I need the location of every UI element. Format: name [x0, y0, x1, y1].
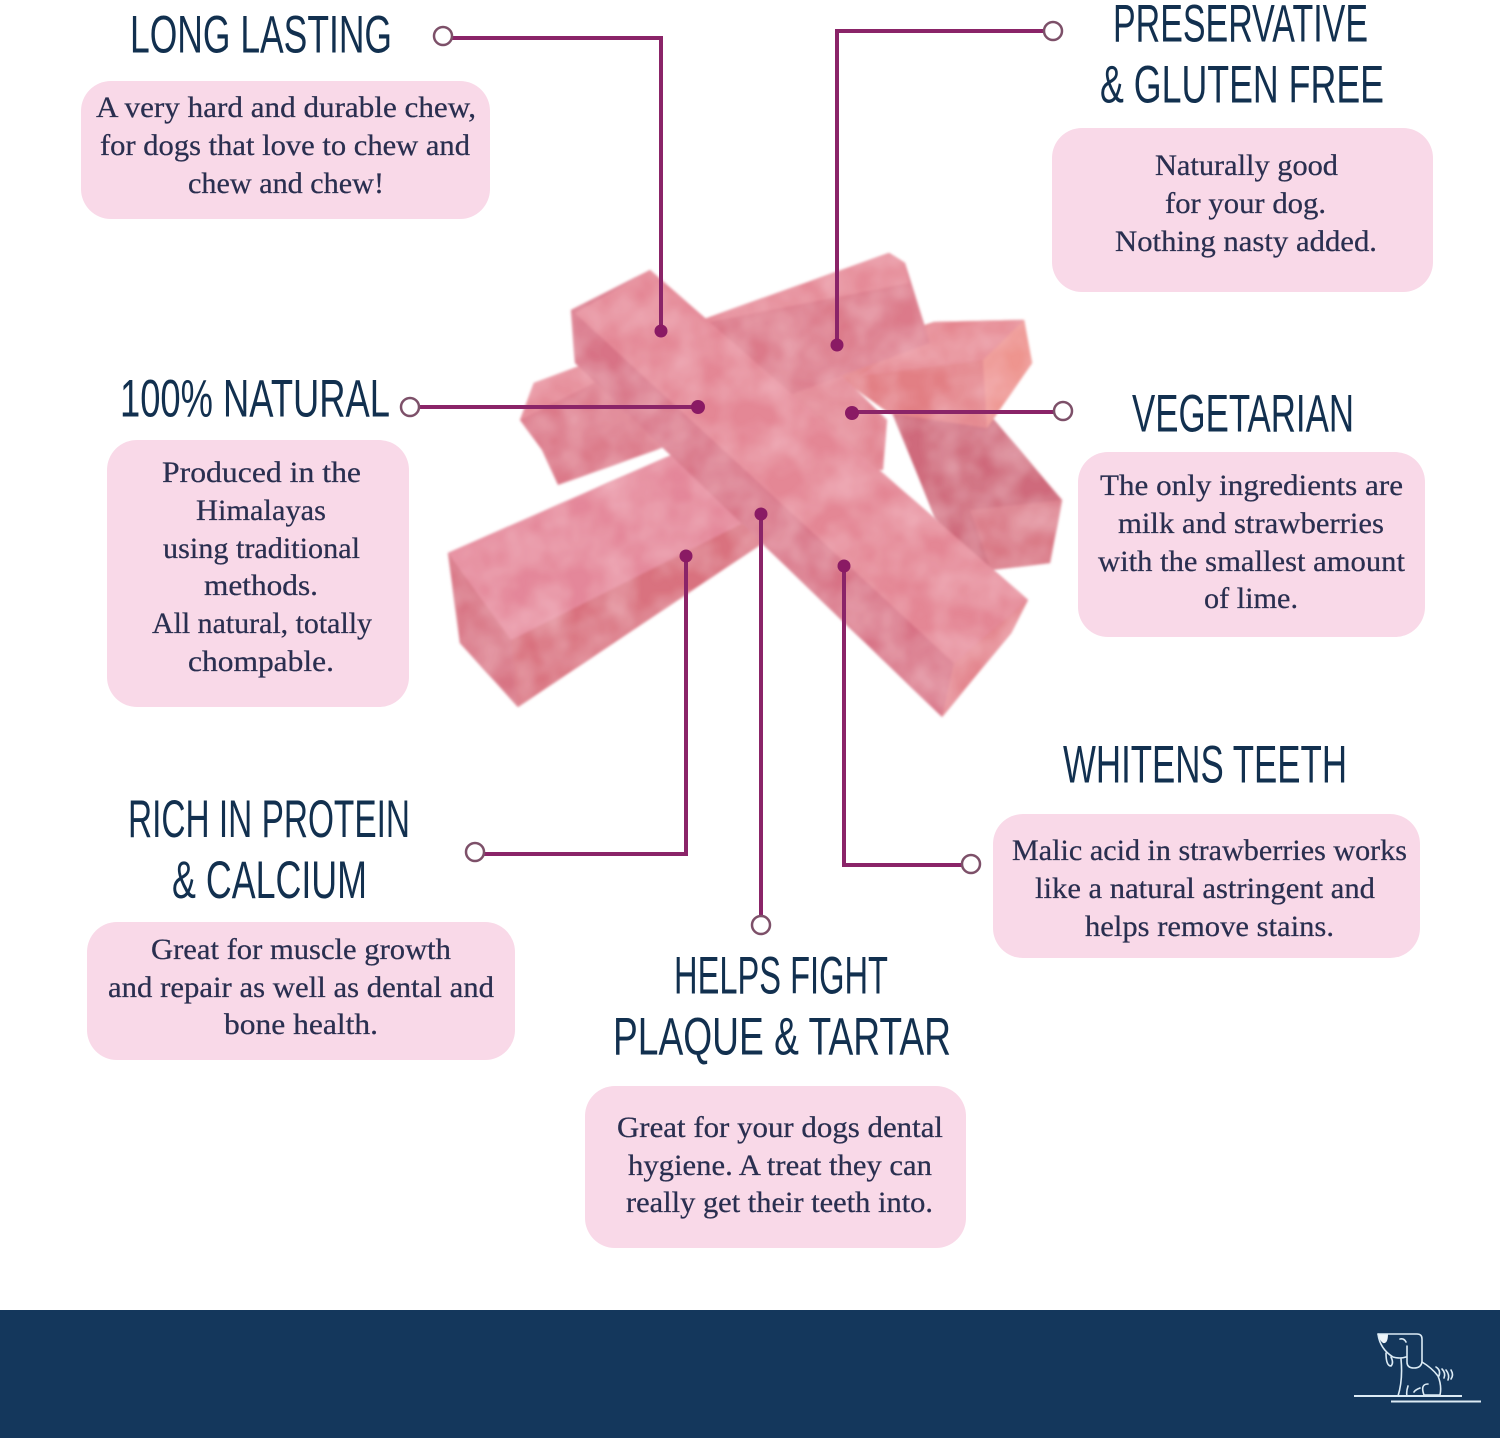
heading: rich in protein and calcium [128, 790, 410, 910]
panel: preservative and gluten free [1052, 0, 1433, 292]
text box: 100% natural: All natural, totally [152, 607, 372, 640]
heading: helps fight plaque and tartar: HELPS FIGHT [674, 946, 888, 1006]
heading: vegetarian: VEGETARIAN [1132, 384, 1354, 444]
panel: vegetarian [1078, 384, 1425, 637]
text box: whitens teeth: helps remove stains. [1085, 910, 1334, 943]
heading: helps fight plaque and tartar [613, 946, 951, 1066]
panel: whitens teeth [993, 736, 1420, 958]
panel: long lasting [81, 6, 490, 219]
text box: vegetarian: milk and strawberries [1118, 507, 1384, 540]
chew stick: lower right [889, 405, 1062, 570]
heading: rich in protein and calcium: & CALCIUM [172, 851, 367, 910]
panel: 100% natural [107, 370, 409, 707]
connector: rich in protein [466, 550, 692, 861]
text box: vegetarian: with the smallest amount [1098, 545, 1406, 578]
heading: 100% natural: 100% NATURAL [120, 370, 390, 428]
chew stick: right end behind centre stick [780, 372, 887, 470]
text box: 100% natural [107, 440, 409, 707]
chew stick: front centre [571, 270, 1028, 717]
text box: rich in protein and calcium: bone health. [224, 1008, 378, 1041]
text box: rich in protein and calcium: Great for muscle growth [151, 933, 451, 966]
text box: long lasting: for dogs that love to chew and [100, 129, 470, 162]
icon: sitting dog logo [1354, 1334, 1481, 1402]
text box: preservative and gluten free: for your dog. [1165, 187, 1326, 220]
text box: long lasting [81, 81, 490, 219]
text box: rich in protein and calcium [87, 922, 515, 1060]
panel: helps fight plaque and tartar [585, 946, 966, 1248]
text box: 100% natural: using traditional [163, 532, 360, 565]
text box: vegetarian: The only ingredients are [1100, 469, 1403, 502]
text box: helps fight plaque and tartar: Great for your dogs dental [617, 1111, 943, 1144]
heading: preservative and gluten free [1100, 0, 1384, 114]
connector: helps fight plaque [752, 508, 770, 934]
heading: long lasting: LONG LASTING [130, 6, 392, 64]
chew stick: back [520, 253, 930, 485]
text box: 100% natural: Himalayas [196, 494, 326, 527]
heading: whitens teeth: WHITENS TEETH [1063, 736, 1347, 794]
connector: vegetarian [845, 402, 1072, 420]
heading: rich in protein and calcium: RICH IN PROTEIN [128, 790, 410, 849]
chew stick: upper right [820, 320, 1032, 428]
text box: preservative and gluten free: Naturally good [1155, 149, 1338, 182]
text box: whitens teeth: Malic acid in strawberries works [1012, 834, 1407, 867]
text box: whitens teeth: like a natural astringent and [1035, 872, 1375, 905]
connector: preservative and gluten free [830, 22, 1062, 352]
connector: 100% natural [401, 398, 705, 416]
text box: helps fight plaque and tartar: hygiene. A treat they can [628, 1149, 932, 1182]
text box: preservative and gluten free [1052, 128, 1433, 292]
text box: helps fight plaque and tartar [585, 1086, 966, 1248]
footer band [0, 1310, 1500, 1438]
text box: 100% natural: methods. [204, 569, 318, 602]
text box: long lasting: chew and chew! [188, 167, 384, 200]
text box: whitens teeth [993, 814, 1420, 958]
product photo: pink chew sticks [448, 253, 1062, 717]
connector: long lasting [434, 27, 668, 338]
panel: rich in protein and calcium [87, 790, 515, 1060]
text box: 100% natural: Produced in the [162, 456, 361, 489]
chew stick: lower left [448, 447, 790, 707]
text box: rich in protein and calcium: and repair as well as dental and [108, 971, 494, 1004]
connector: whitens teeth [838, 560, 980, 873]
text box: helps fight plaque and tartar: really get their teeth into. [626, 1186, 933, 1219]
text box: vegetarian [1078, 452, 1425, 637]
text box: 100% natural: chompable. [188, 645, 334, 678]
text box: vegetarian: of lime. [1204, 582, 1298, 615]
heading: helps fight plaque and tartar: PLAQUE & TARTAR [613, 1008, 951, 1066]
text box: preservative and gluten free: Nothing nasty added. [1115, 225, 1377, 258]
text box: long lasting: A very hard and durable chew, [96, 91, 476, 124]
